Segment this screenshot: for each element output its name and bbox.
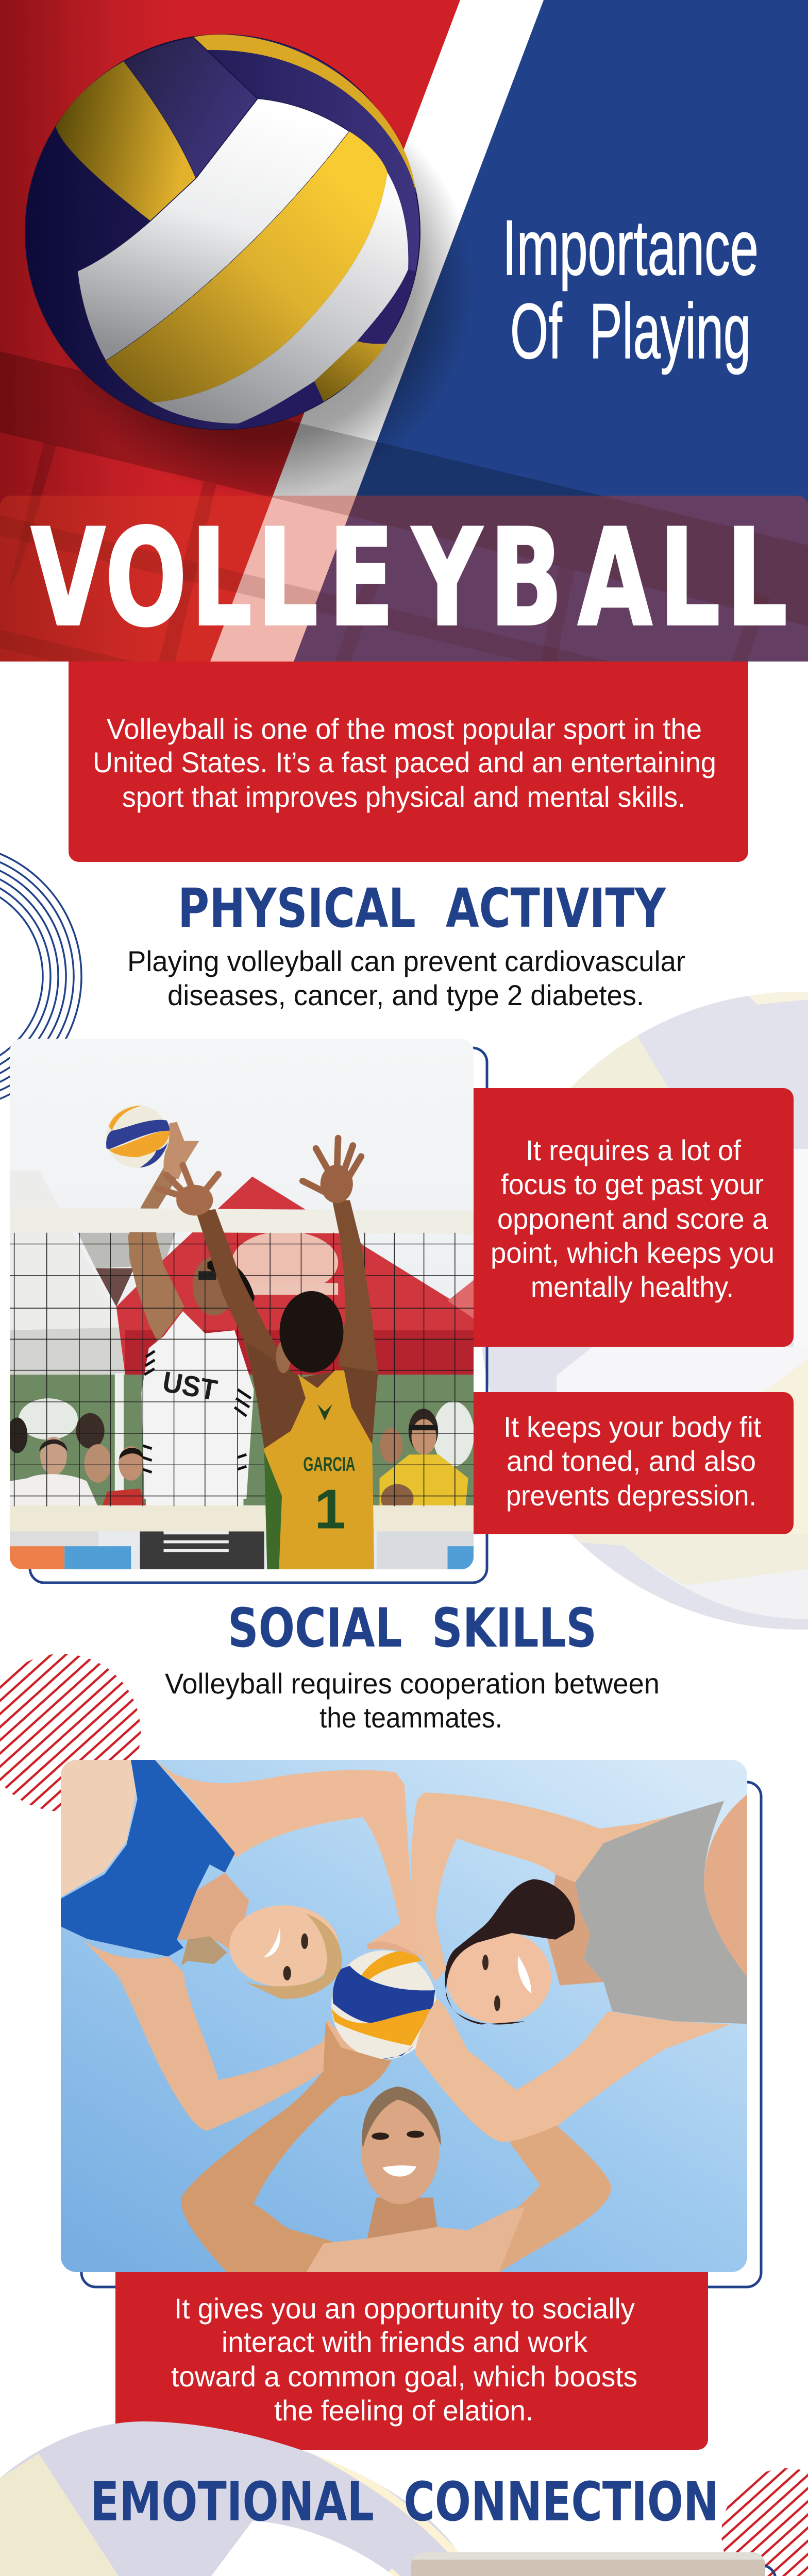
crowd background xyxy=(7,1373,474,1514)
intro text: sport that improves physical and mental skills. xyxy=(122,781,685,813)
decorative striped circle left xyxy=(0,1654,141,1811)
intro text: United States. It’s a fast paced and an entertaining xyxy=(93,746,716,778)
physical activity text: Playing volleyball can prevent cardiovascular xyxy=(127,945,685,977)
intro callout xyxy=(69,662,748,862)
intro text xyxy=(93,713,716,813)
right player xyxy=(158,1138,378,1570)
physical activity text: diseases, cancer, and type 2 diabetes. xyxy=(167,979,644,1011)
decorative striped circle right xyxy=(721,2468,808,2576)
photo frame outline xyxy=(441,2565,776,2576)
callout: mental health xyxy=(474,1088,794,1347)
callout text: point, which keeps you xyxy=(491,1236,775,1269)
ball shadow xyxy=(65,134,464,493)
background volleyball watermark left xyxy=(0,2416,474,2576)
net top tape xyxy=(60,1208,474,1234)
right player: GARCIA xyxy=(303,1453,355,1476)
net graphic xyxy=(0,351,808,662)
decorative concentric arcs xyxy=(0,843,81,1109)
callout text: focus to get past your xyxy=(501,1168,764,1200)
woman left xyxy=(61,1760,422,2131)
woman right xyxy=(411,1792,747,2142)
photo: girl serving volleyball in gym xyxy=(411,2552,766,2576)
net grid xyxy=(10,1233,474,1506)
heading: social skills: SOCIAL SKILLS xyxy=(228,1597,597,1659)
photo: three friends with ball from below xyxy=(61,1760,747,2273)
social skills text: the teammates. xyxy=(319,1701,502,1734)
callout text: the feeling of elation. xyxy=(274,2394,533,2427)
tent white xyxy=(10,1171,125,1378)
header background panels xyxy=(0,0,808,662)
callout text: mentally healthy. xyxy=(531,1270,734,1303)
callout text xyxy=(491,1134,775,1303)
photo frame outline xyxy=(30,1048,487,1583)
callout text: interact with friends and work xyxy=(222,2326,588,2358)
callout: socially interact xyxy=(115,2272,708,2450)
callout text: prevents depression. xyxy=(506,1479,756,1512)
callout text: toward a common goal, which boosts xyxy=(171,2360,637,2393)
ball held by group xyxy=(324,1941,481,2096)
title: volleyball: VOLLEYBALL xyxy=(31,501,787,656)
left player: UST xyxy=(160,1365,220,1406)
right player: 1 xyxy=(314,1478,346,1541)
social skills text xyxy=(165,1667,660,1734)
callout text: and toned, and also xyxy=(507,1445,756,1477)
physical activity text xyxy=(127,945,685,1011)
net bottom tape xyxy=(10,1505,474,1531)
man below xyxy=(181,2054,612,2273)
callout text: It keeps your body fit xyxy=(503,1411,761,1443)
title band xyxy=(0,496,808,671)
ball in photo xyxy=(106,1105,170,1168)
left player xyxy=(128,1122,264,1570)
callout text xyxy=(171,2292,637,2427)
subtitle: importance of playing xyxy=(507,221,756,375)
callout text: It gives you an opportunity to socially xyxy=(174,2292,635,2325)
photo: beach volleyball block at net xyxy=(7,1038,474,1573)
social skills text: Volleyball requires cooperation between xyxy=(165,1667,660,1700)
callout: body fit xyxy=(474,1392,794,1534)
photo frame outline xyxy=(81,1782,761,2287)
callout text: It requires a lot of xyxy=(526,1134,741,1166)
callout text xyxy=(503,1411,761,1512)
icon: volleyball xyxy=(25,35,420,430)
intro text: Volleyball is one of the most popular sport in the xyxy=(107,713,702,745)
tent red xyxy=(78,1177,474,1375)
heading: physical activity: PHYSICAL ACTIVITY xyxy=(178,877,666,940)
background volleyball watermark right xyxy=(464,979,808,1649)
header banner xyxy=(0,0,808,662)
callout text: opponent and score a xyxy=(497,1202,768,1235)
lower court background xyxy=(10,1531,474,1573)
